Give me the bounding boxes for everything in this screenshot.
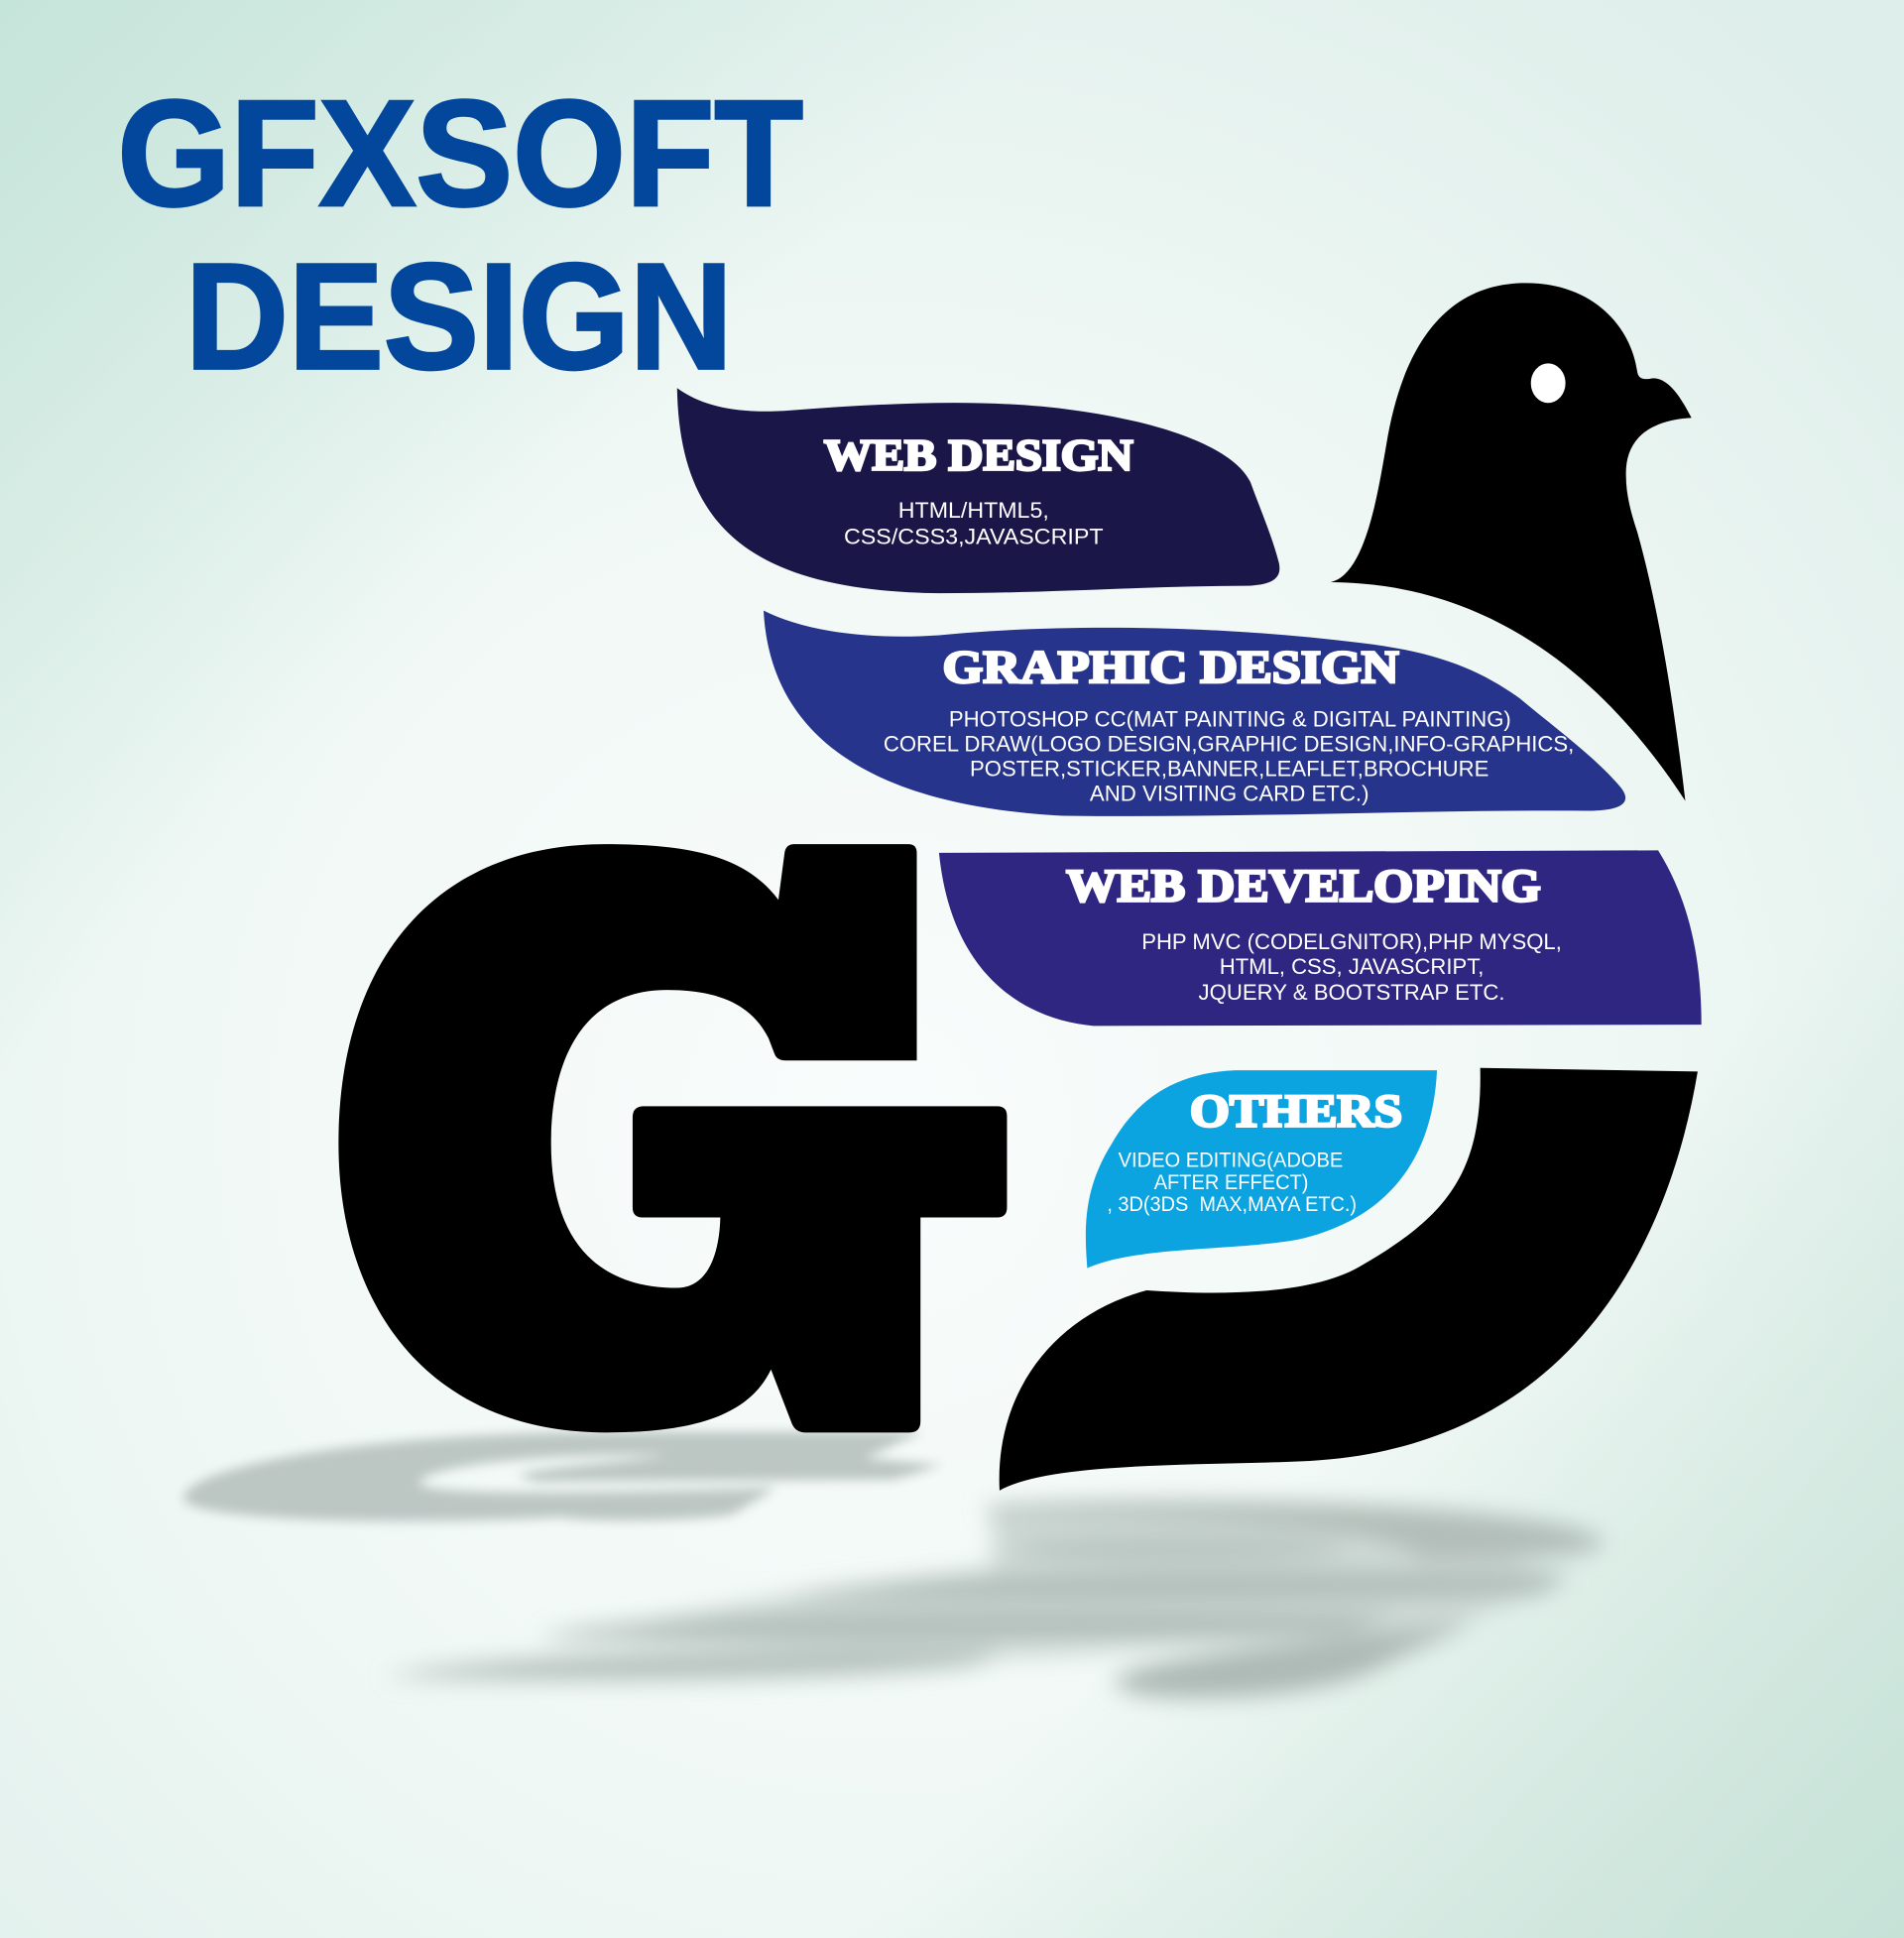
- text: graphic design skills: COREL DRAW(LOGO DESIGN,GRAPHIC DESIGN,INFO-GRAPHICS,: [884, 732, 1574, 757]
- text: web developing skills: PHP MVC (CODELGNITOR),PHP MYSQL,: [1141, 929, 1562, 954]
- text: web developing skills: HTML, CSS, JAVASCRIPT,: [1220, 954, 1484, 979]
- title: DESIGN: [185, 232, 733, 401]
- text: web developing skills: [1141, 929, 1562, 1005]
- text: web developing skills: JQUERY & BOOTSTRAP ETC.: [1199, 980, 1505, 1005]
- heading: graphic design: GRAPHIC DESIGN: [943, 642, 1398, 692]
- shadow: letter G: [183, 1432, 943, 1521]
- text: other skills: [1107, 1149, 1357, 1216]
- text: other skills: AFTER EFFECT): [1154, 1171, 1308, 1194]
- text: other skills: VIDEO EDITING(ADOBE: [1119, 1149, 1343, 1171]
- bird head and neck: [1331, 283, 1692, 801]
- text: graphic design skills: [884, 707, 1574, 806]
- panel: web design: [677, 388, 1279, 593]
- letter G body: [338, 844, 1007, 1432]
- text: web design skills: CSS/CSS3,JAVASCRIPT: [844, 524, 1104, 548]
- title: [117, 69, 803, 401]
- heading: web design: WEB DESIGN: [824, 430, 1133, 480]
- text: web design skills: HTML/HTML5,: [898, 498, 1049, 523]
- icon: bird eye: [1531, 363, 1566, 403]
- heading: web developing: WEB DEVELOPING: [1066, 860, 1541, 910]
- text: graphic design skills: POSTER,STICKER,BANNER,LEAFLET,BROCHURE: [970, 757, 1488, 782]
- text: graphic design skills: AND VISITING CARD ETC.): [1090, 782, 1369, 806]
- text: other skills: , 3D(3DS MAX,MAYA ETC.): [1107, 1193, 1357, 1216]
- heading: others: OTHERS: [1190, 1085, 1402, 1136]
- bird tail: [1000, 1068, 1698, 1491]
- panel: others: [1086, 1070, 1437, 1269]
- panel: graphic design: [764, 611, 1625, 816]
- panel: web developing: [939, 850, 1702, 1026]
- shadow: bird: [384, 1501, 1604, 1698]
- text: graphic design skills: PHOTOSHOP CC(MAT PAINTING & DIGITAL PAINTING): [949, 707, 1511, 732]
- text: web design skills: [844, 498, 1104, 548]
- title: GFXSOFT: [117, 69, 803, 238]
